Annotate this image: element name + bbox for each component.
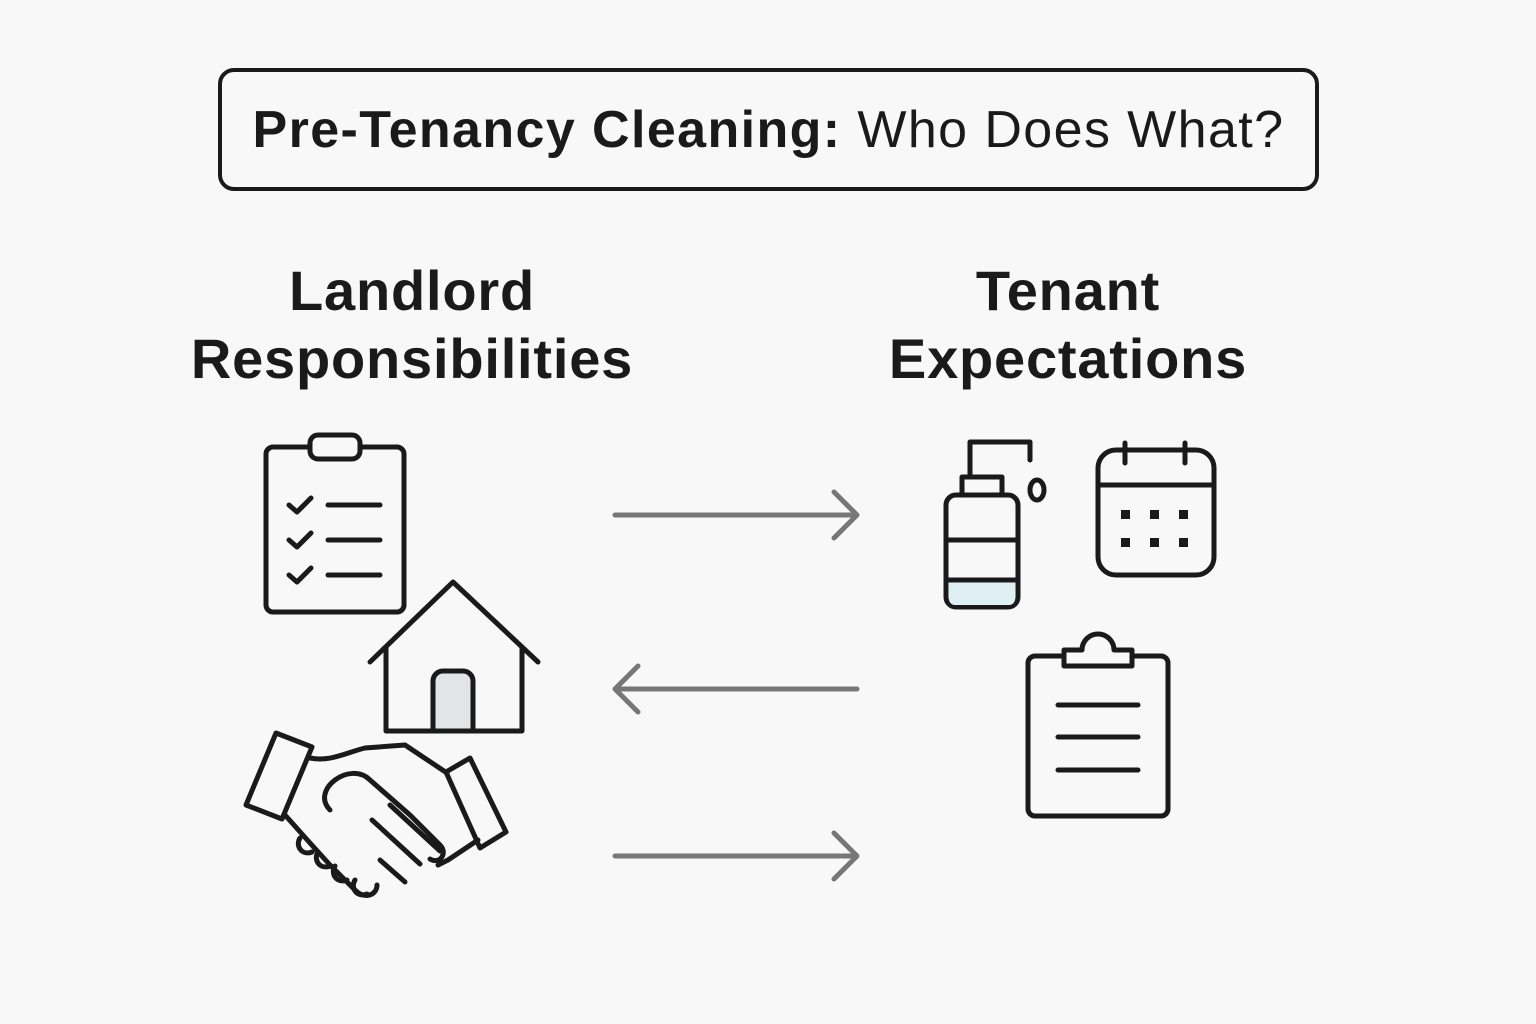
title: Pre-Tenancy Cleaning: Who Does What? [253,100,1284,158]
icon: handshake [246,733,506,895]
heading: tenant: Expectations [889,327,1247,390]
icon: calendar [1098,443,1214,575]
heading: tenant: Tenant [976,259,1160,322]
arrow: right top [615,492,857,538]
heading: tenant [889,259,1247,390]
icon: tenant clipboard [1028,634,1168,816]
heading: landlord: Landlord [289,259,535,322]
icon: checklist clipboard [266,435,404,612]
arrow: right bottom [615,833,857,879]
icon: house [370,582,538,731]
title [218,68,1319,191]
heading: landlord: Responsibilities [191,327,633,390]
arrow: left middle [615,666,857,712]
icon: soap bottle [946,442,1044,607]
heading: landlord [191,259,633,390]
